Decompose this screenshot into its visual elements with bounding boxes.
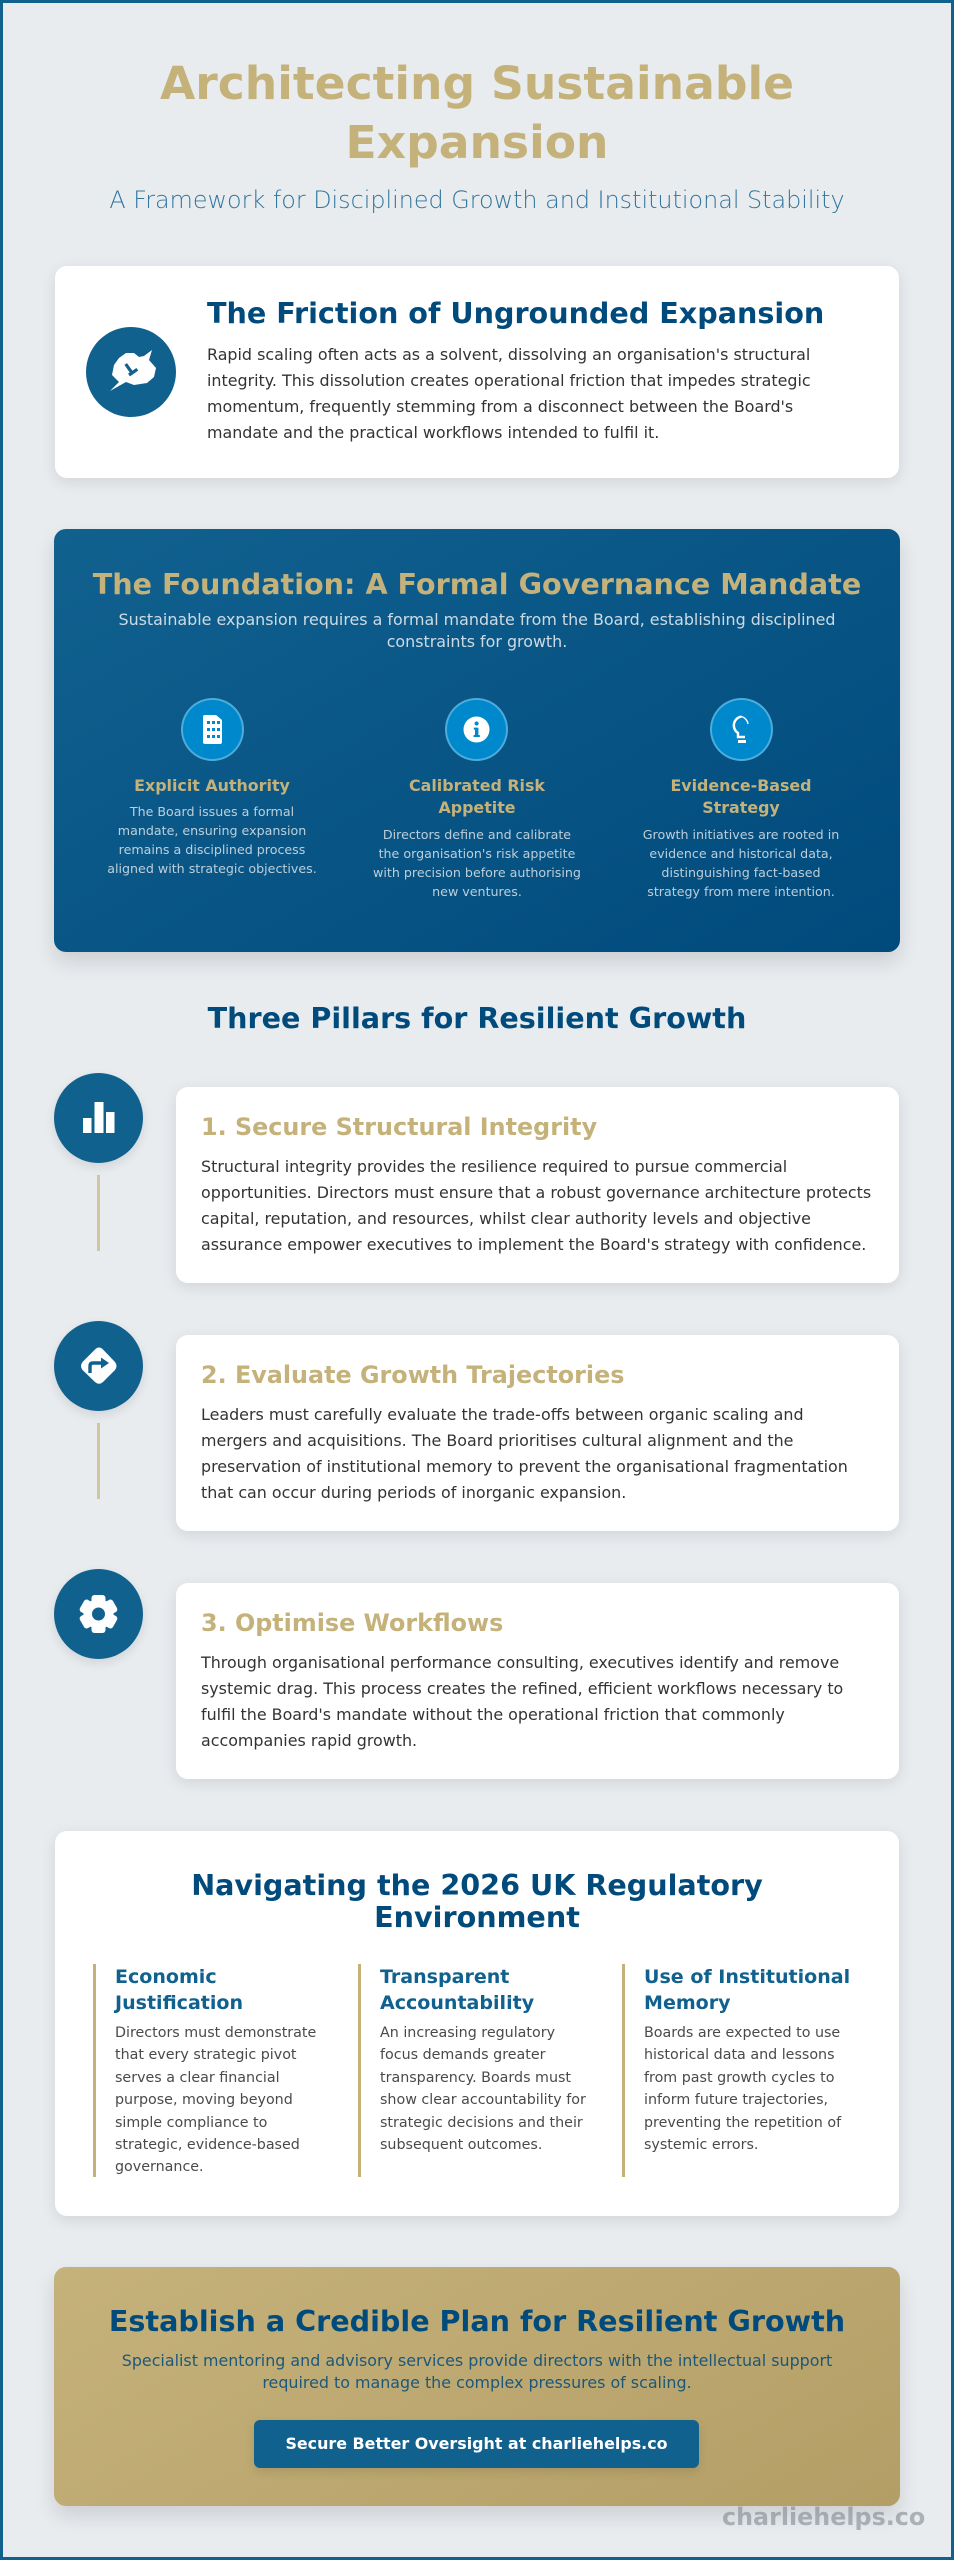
icon: gear: [54, 1569, 143, 1659]
panel: regulatory: [55, 1831, 899, 2216]
body text: momentum, frequently stemming from a disconnect between the Board's: [207, 397, 793, 416]
column text: institutional memory: systemic errors.: [644, 2137, 758, 2153]
column text: transparent accountability: An increasing regulatory: [380, 2025, 555, 2041]
column text: explicit authority: aligned with strategic objectives.: [107, 861, 317, 876]
column text: institutional memory: inform future trajectories,: [644, 2092, 828, 2108]
body text: [207, 345, 811, 442]
column title: evidence-based: Strategy: [702, 798, 780, 817]
foundation intro: [118, 610, 836, 651]
pillar 3 text: [200, 1653, 843, 1750]
body text: integrity. This dissolution creates operational friction that impedes strategic: [207, 371, 811, 390]
pillar 1 text: Structural integrity provides the resilience required to pursue commercial: [201, 1157, 787, 1176]
column text: calibrated risk: [373, 827, 581, 899]
column title: transparent accountability: [380, 1966, 534, 2014]
column text: economic justification: serves a clear financial: [115, 2070, 280, 2086]
column text: explicit authority: mandate, ensuring expansion: [118, 823, 306, 838]
icon: document building: [181, 698, 244, 761]
column title: evidence-based: Evidence-Based: [670, 776, 812, 795]
column text: transparent accountability: focus demands greater: [380, 2047, 546, 2063]
column title: institutional memory: Memory: [644, 1992, 731, 2014]
button: [254, 2420, 699, 2468]
pillar 2 text: mergers and acquisitions. The Board prioritises cultural alignment and the: [201, 1431, 793, 1450]
column text: economic justification: Directors must demonstrate: [115, 2025, 316, 2041]
pillar 1 text: assurance empower executives to implement the Board's strategy with confidence.: [201, 1235, 866, 1254]
column text: explicit authority: remains a disciplined process: [119, 842, 305, 857]
column text: calibrated risk: new ventures.: [432, 884, 522, 899]
column text: institutional memory: preventing the repetition of: [644, 2115, 841, 2131]
column text: evidence-based: evidence and historical data,: [649, 846, 833, 861]
icon: light bulb: [710, 698, 773, 761]
pillar 3 title: 3. Optimise Workflows: [201, 1609, 503, 1637]
icon: bar chart: [54, 1073, 143, 1163]
pillar 3 text: fulfil the Board's mandate without the operational friction that commonly: [201, 1705, 785, 1724]
column text: economic justification: simple compliance to: [115, 2115, 267, 2131]
regulatory heading: Navigating the 2026 UK Regulatory: [191, 1868, 763, 1902]
title: [160, 57, 794, 169]
column text: institutional memory: Boards are expected to use: [644, 2025, 840, 2041]
column text: economic justification: purpose, moving beyond: [115, 2092, 293, 2108]
pillar 2 text: preservation of institutional memory to prevent the organisational fragmentation: [201, 1457, 848, 1476]
pillar 1 card: [176, 1087, 899, 1283]
column text: transparent accountability: subsequent outcomes.: [380, 2137, 542, 2153]
pillar 3 text: systemic drag. This process creates the refined, efficient workflows necessary to: [201, 1679, 843, 1698]
section heading: pillars: Three Pillars for Resilient Growth: [208, 1001, 746, 1035]
column text: economic justification: governance.: [115, 2159, 204, 2175]
column rule 3: [622, 1964, 625, 2177]
column text: economic justification: strategic, evidence-based: [115, 2137, 300, 2153]
regulatory heading: Environment: [374, 1900, 580, 1934]
column title: institutional memory: Use of Institutional: [644, 1966, 850, 1988]
pillar 3 text: accompanies rapid growth.: [201, 1731, 417, 1750]
foundation heading: The Foundation: A Formal Governance Mandate: [93, 567, 861, 601]
column text: explicit authority: The Board issues a formal: [130, 804, 294, 819]
call to action heading: Establish a Credible Plan for Resilient Growth: [109, 2304, 845, 2338]
panel: friction: [55, 266, 899, 478]
panel: foundation: [54, 529, 900, 952]
column text: transparent accountability: [380, 2025, 586, 2153]
pillar 2 title: 2. Evaluate Growth Trajectories: [201, 1361, 624, 1389]
column title: calibrated risk: [409, 776, 546, 817]
panel: call to action: [54, 2267, 900, 2506]
pillar 3 card: [176, 1583, 899, 1779]
title: Architecting Sustainable: [160, 57, 794, 110]
pillar 2 card: [176, 1335, 899, 1531]
column title: evidence-based: [670, 776, 812, 817]
column text: evidence-based: distinguishing fact-based: [661, 865, 821, 880]
pillar 1 text: opportunities. Directors must ensure that a robust governance architecture protects: [201, 1183, 871, 1202]
column text: calibrated risk: Directors define and calibrate: [383, 827, 571, 842]
foundation intro: constraints for growth.: [387, 632, 567, 651]
body text: Rapid scaling often acts as a solvent, dissolving an organisation's structural: [207, 345, 810, 364]
connector: [97, 1175, 100, 1251]
subtitle: A Framework for Disciplined Growth and Institutional Stability: [109, 186, 845, 214]
pillar 2 text: Leaders must carefully evaluate the trade-offs between organic scaling and: [201, 1405, 804, 1424]
regulatory heading: [191, 1868, 763, 1934]
icon: information: [445, 698, 508, 761]
call to action text: Specialist mentoring and advisory services provide directors with the intellectual support: [122, 2351, 832, 2370]
heading: The Friction of Ungrounded Expansion: [207, 296, 824, 330]
body text: mandate and the practical workflows intended to fulfil it.: [207, 423, 659, 442]
column rule 1: [93, 1964, 96, 2177]
pillar 2 text: that can occur during periods of inorganic expansion.: [201, 1483, 626, 1502]
column text: calibrated risk: the organisation's risk appetite: [379, 846, 575, 861]
column text: evidence-based: strategy from mere intention.: [647, 884, 835, 899]
column title: economic justification: [114, 1966, 243, 2014]
icon: directions sign: [54, 1321, 143, 1411]
foundation intro: Sustainable expansion requires a formal mandate from the Board, establishing disciplined: [118, 610, 836, 629]
column title: transparent accountability: Accountability: [380, 1992, 534, 2014]
pillar 2 text: [201, 1405, 848, 1502]
column rule 2: [358, 1964, 361, 2177]
button: Secure Better Oversight at charliehelps.co: [285, 2434, 668, 2453]
column text: explicit authority: [107, 804, 317, 876]
column title: calibrated risk: Appetite: [438, 798, 516, 817]
column text: economic justification: that every strategic pivot: [115, 2047, 297, 2063]
column title: institutional memory: [644, 1966, 850, 2014]
call to action text: required to manage the complex pressures of scaling.: [262, 2373, 692, 2392]
column text: transparent accountability: transparency. Boards must: [380, 2070, 571, 2086]
column title: calibrated risk: Calibrated Risk: [409, 776, 545, 795]
watermark: charliehelps.co: [722, 2503, 925, 2531]
column title: transparent accountability: Transparent: [380, 1966, 509, 1988]
column title: economic justification: Economic: [115, 1966, 217, 1988]
column text: institutional memory: historical data and lessons: [644, 2047, 835, 2063]
column text: institutional memory: from past growth cycles to: [644, 2070, 834, 2086]
pillar 3 text: Through organisational performance consulting, executives identify and remove: [201, 1653, 839, 1672]
title: Expansion: [346, 116, 608, 169]
column text: transparent accountability: show clear accountability for: [380, 2092, 586, 2108]
column text: evidence-based: [643, 827, 839, 899]
column text: economic justification: [115, 2025, 316, 2175]
column text: institutional memory: [644, 2025, 842, 2153]
column title: explicit authority: Explicit Authority: [134, 776, 290, 795]
pillar 1 title: 1. Secure Structural Integrity: [201, 1113, 597, 1141]
column text: evidence-based: Growth initiatives are rooted in: [643, 827, 839, 842]
pillar 1 text: [201, 1157, 871, 1254]
pillar 1 text: capital, reputation, and resources, whilst clear authority levels and objective: [201, 1209, 811, 1228]
column title: economic justification: Justification: [115, 1992, 243, 2014]
call to action text: [122, 2351, 832, 2392]
icon: broken plug: [86, 327, 176, 417]
column text: calibrated risk: with precision before authorising: [373, 865, 581, 880]
column text: transparent accountability: strategic decisions and their: [380, 2115, 583, 2131]
connector: [97, 1423, 100, 1499]
